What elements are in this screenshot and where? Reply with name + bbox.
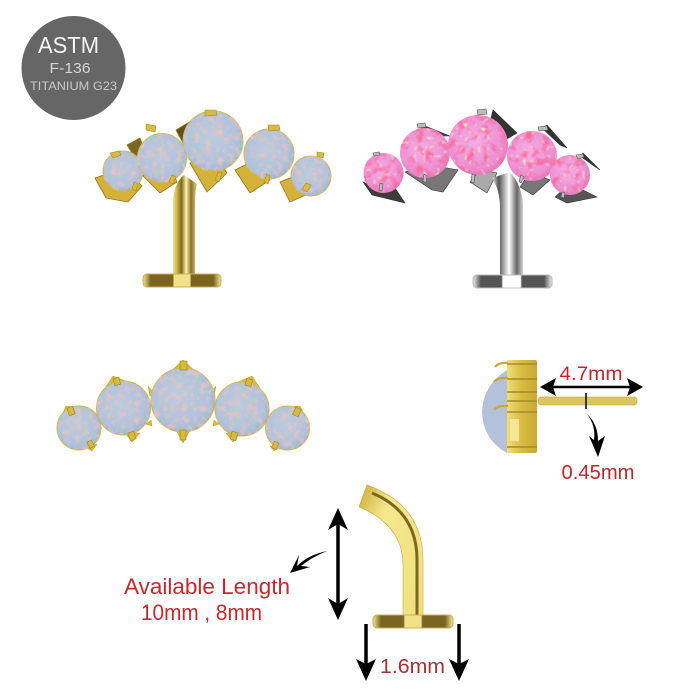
badge: ASTM F-136 titanium G23 [22,16,126,120]
arrow: length double arrow [328,508,348,620]
gold jewellery, white opal, side view [95,110,331,287]
arrow: curved pointer to available length [290,551,327,573]
dimension: 1.6mm base width: 1.6mm [380,656,445,678]
pin [538,397,637,405]
badge: ASTM F-136 titanium G23: ASTM [38,32,99,58]
pink opal stones [364,115,590,195]
label: available length [124,574,290,625]
label: available length: 10mm , 8mm [141,600,262,625]
silver prongs [373,109,584,198]
gold settings behind stones [95,118,328,202]
gold jewellery, profile view with pin [482,360,637,453]
curved bar [359,485,423,615]
badge: ASTM F-136 titanium G23: F-136 [50,60,90,77]
white opal stones [57,368,310,450]
opal edge [482,370,507,453]
dimension: 0.45mm pin thickness [562,393,634,484]
gold prongs [110,110,324,192]
gold base [143,274,221,287]
silver jewellery, pink opal, side view [363,109,600,288]
silver stem [492,172,523,275]
silver settings behind stones [363,110,600,203]
prongs [67,361,301,449]
dimension: 4.7mm: 4.7mm [560,364,622,385]
prong tips and links [60,360,307,451]
gold stem [173,175,197,275]
flat base [373,615,453,628]
gold setting block [494,360,537,453]
gold curved bar with flat base [359,485,453,628]
dimension: 4.7mm [540,364,643,396]
white opal stones [103,111,331,196]
badge: ASTM F-136 titanium G23: TITANIUM G23 [30,79,117,93]
silver base [473,275,552,288]
dimension: 0.45mm pin thickness: 0.45mm [562,462,634,484]
dimension: 1.6mm base width [356,624,469,681]
label: available length: Available Length [124,574,290,599]
gold jewellery, front view [57,360,310,451]
